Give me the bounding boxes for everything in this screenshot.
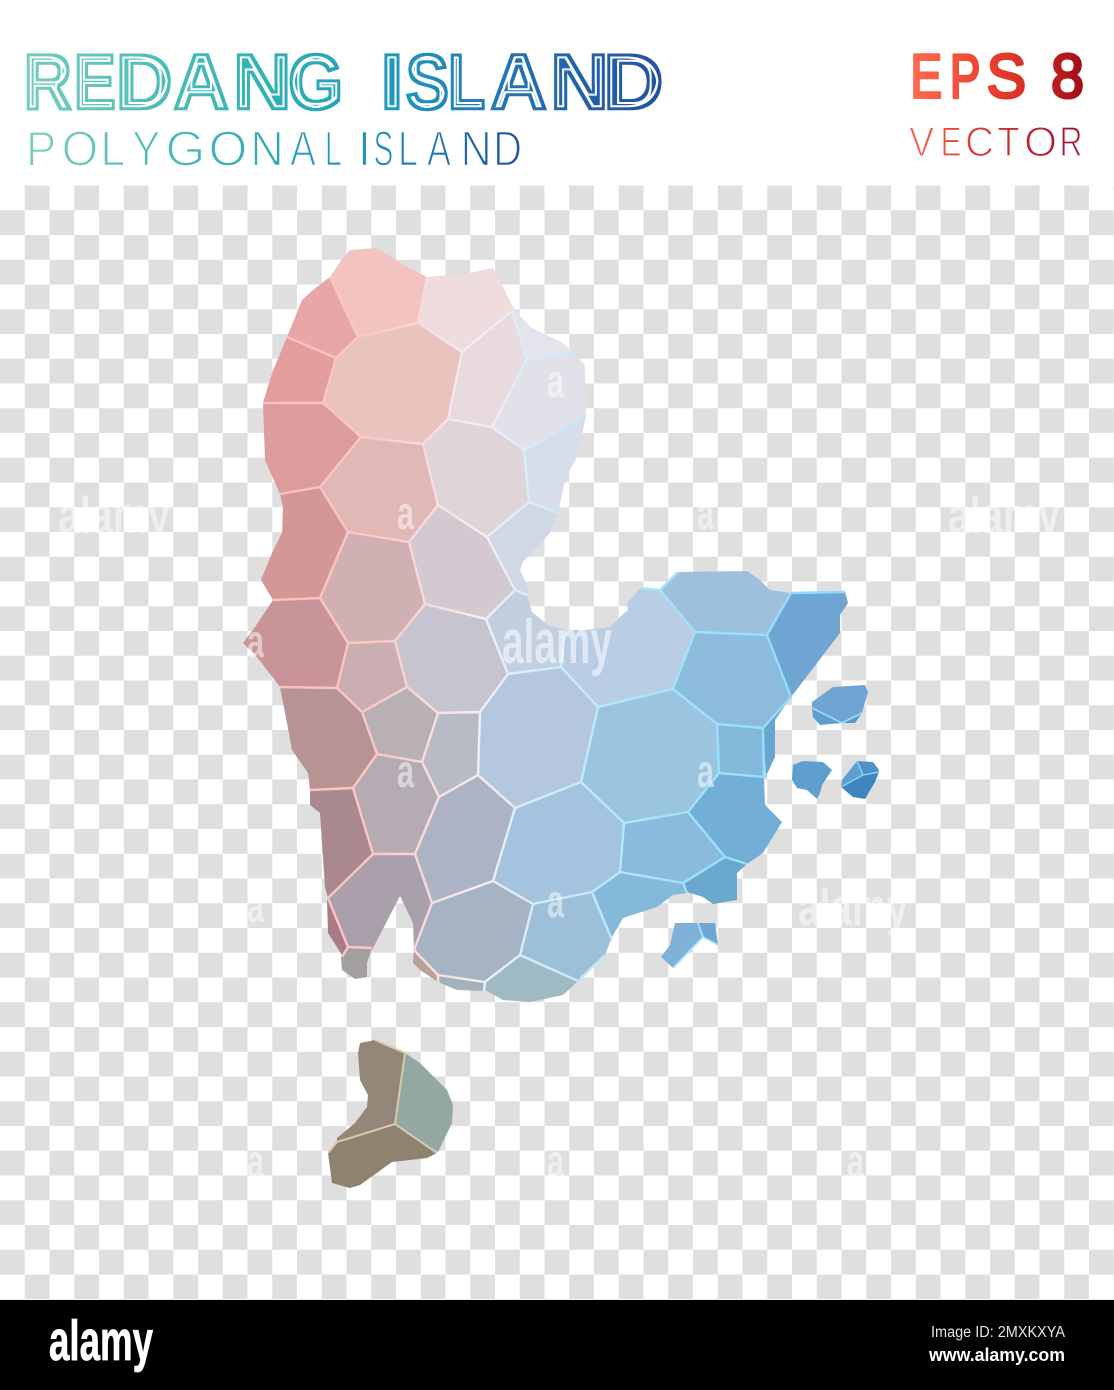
- title: Redang Island: E: [74, 37, 116, 126]
- badge: Vector: T: [997, 118, 1020, 165]
- footer bar: [0, 1300, 1114, 1390]
- badge: EPS 8: P: [950, 42, 980, 112]
- title: Redang Island: I: [380, 37, 404, 126]
- subtitle: Polygonal Island: N: [250, 122, 284, 176]
- badge: Vector: R: [1060, 118, 1082, 165]
- badge: EPS 8: E: [910, 42, 942, 112]
- east islet: [792, 761, 832, 799]
- stock watermarks: a: [697, 745, 714, 797]
- stock watermarks: [58, 355, 1060, 1187]
- title: Redang Island: L: [448, 37, 486, 126]
- stock watermarks: a: [247, 880, 264, 932]
- title: Redang Island: S: [405, 37, 449, 126]
- title: Redang Island: R: [23, 37, 72, 126]
- footer logo: alamy: [49, 1309, 153, 1373]
- subtitle: Polygonal Island: O: [62, 122, 98, 176]
- website: www.alamy.com: [928, 1345, 1065, 1365]
- subtitle: Polygonal Island: L: [100, 122, 125, 176]
- image id: Image ID: 2MXKXYA: [931, 1324, 1066, 1341]
- far east islet: [841, 761, 879, 799]
- stock watermarks: a: [547, 355, 564, 407]
- subtitle: Polygonal Island: L: [325, 122, 341, 176]
- badge: EPS 8: 8: [1051, 42, 1084, 112]
- stock watermarks: a: [847, 1135, 864, 1187]
- stock watermarks: a: [547, 1135, 564, 1187]
- badge: Vector: E: [940, 118, 962, 165]
- stock watermarks: a: [547, 875, 564, 927]
- stock watermarks: alamy: [58, 487, 170, 545]
- subtitle: Polygonal Island: A: [290, 122, 316, 176]
- subtitle: Polygonal Island: L: [398, 122, 418, 176]
- subtitle: Polygonal Island: N: [461, 122, 492, 176]
- badge: Vector: V: [909, 118, 934, 165]
- stock watermarks: alamy: [948, 487, 1060, 545]
- south island: [328, 1040, 453, 1188]
- main island polygon cells: [243, 248, 848, 1002]
- polygonal map of Redang Island: [243, 248, 879, 1188]
- title: Redang Island: G: [288, 37, 344, 126]
- stock watermarks: a: [697, 487, 714, 539]
- stock watermarks: alamy: [502, 608, 612, 677]
- northeast islet: [812, 685, 868, 725]
- title: Redang Island: A: [490, 37, 547, 126]
- title: Redang Island: D: [115, 37, 173, 126]
- subtitle: Polygonal Island: Y: [132, 122, 160, 176]
- stock watermarks: alamy: [798, 879, 908, 937]
- title: Redang Island: N: [233, 37, 292, 126]
- southeast islet: [661, 923, 718, 968]
- badge: Vector: C: [965, 118, 994, 165]
- subtitle: Polygonal Island: D: [493, 122, 522, 176]
- title: Redang Island: A: [173, 37, 229, 126]
- subtitle: Polygonal Island: G: [165, 122, 205, 176]
- subtitle: Polygonal Island: A: [427, 122, 451, 176]
- main island cell borders: [263, 277, 845, 991]
- title: Redang Island: D: [603, 37, 664, 126]
- subtitle: Polygonal Island: P: [26, 122, 56, 176]
- subtitle: Polygonal Island: S: [374, 122, 393, 176]
- title: Redang Island: N: [550, 37, 609, 126]
- stock watermarks: a: [397, 745, 414, 797]
- badge: Vector: O: [1024, 118, 1057, 165]
- stock watermarks: a: [397, 487, 414, 539]
- subtitle: Polygonal Island: I: [358, 122, 371, 176]
- subtitle: Polygonal Island: O: [208, 122, 247, 176]
- badge: EPS 8: S: [986, 42, 1026, 112]
- stock watermarks: a: [247, 1135, 264, 1187]
- stock watermarks: a: [247, 615, 264, 667]
